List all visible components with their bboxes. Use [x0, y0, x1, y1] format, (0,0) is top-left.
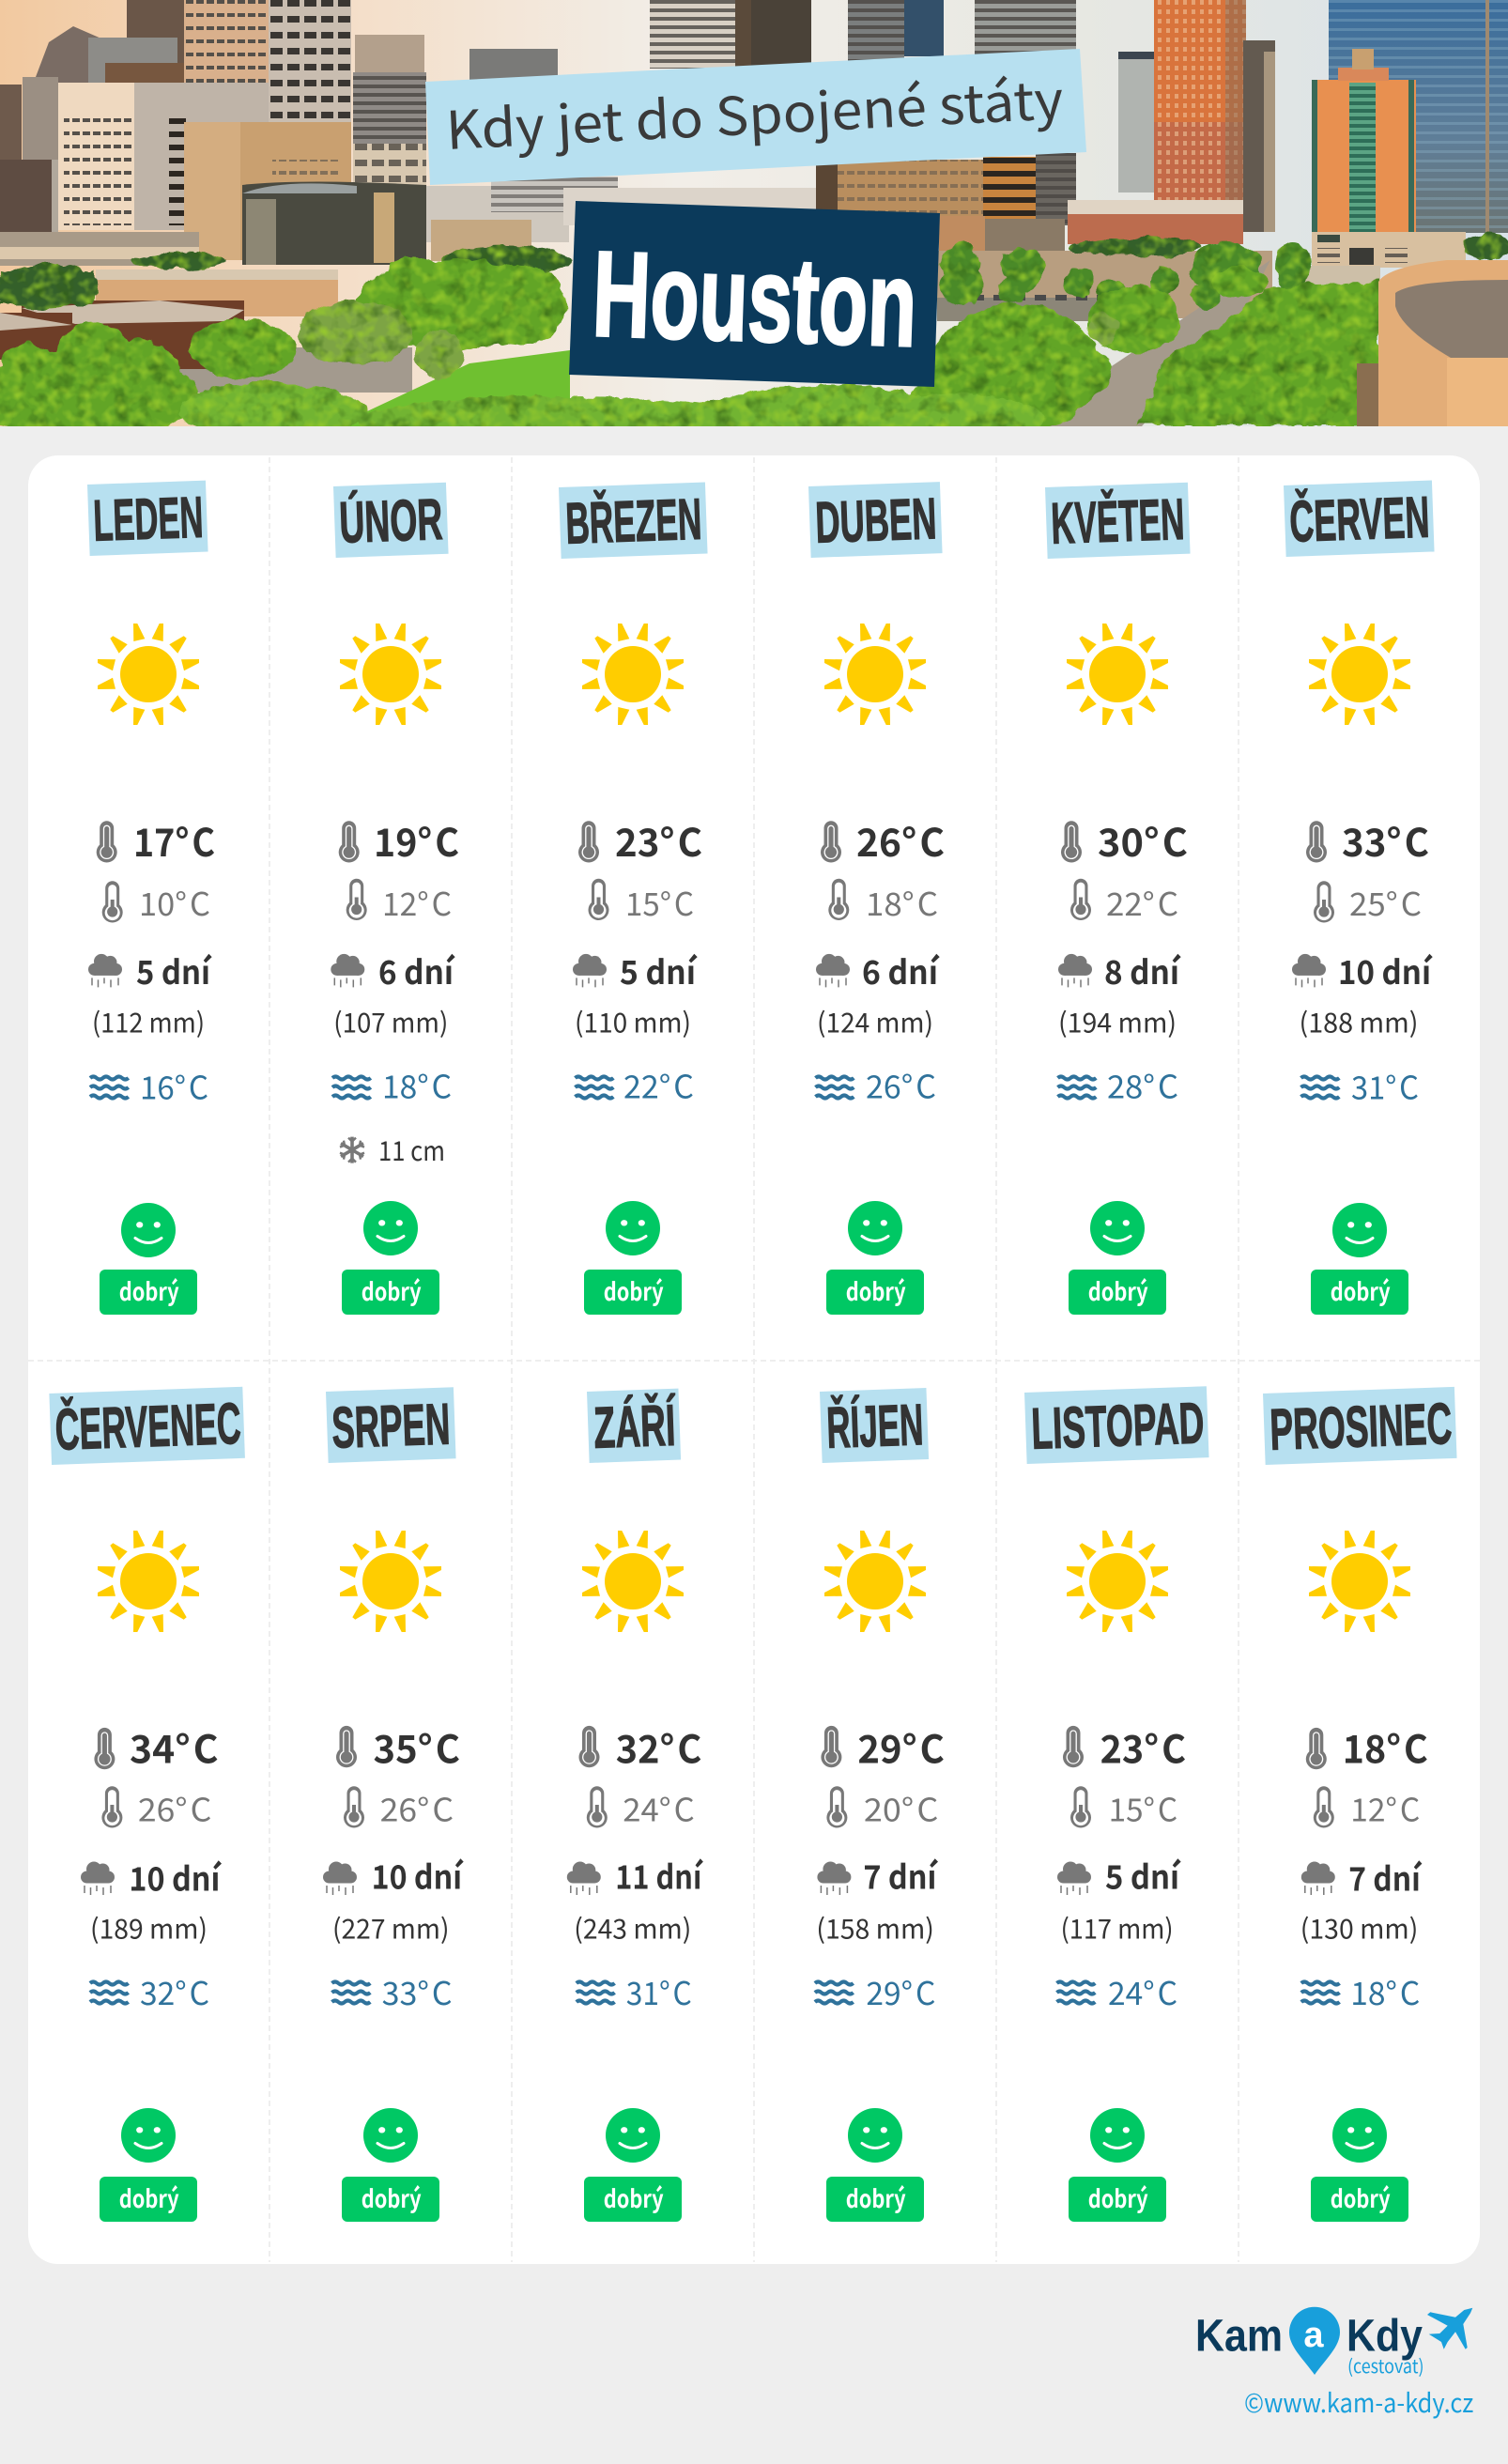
rating badge: [100, 2177, 197, 2222]
min temperature: 10°C: [139, 879, 210, 925]
min temperature: [102, 879, 210, 925]
title text: Houston: [591, 226, 919, 372]
min temperature: [828, 879, 938, 925]
month: listopad: [1024, 1386, 1209, 2222]
sea temperature: 18°C: [382, 1061, 452, 1108]
icon: sun: [1067, 624, 1168, 725]
rating badge: dobrý: [119, 1273, 179, 1308]
sea temperature: 22°C: [623, 1061, 694, 1108]
max temperature: 35°C: [374, 1718, 460, 1775]
precipitation: (188 mm): [1300, 1001, 1418, 1040]
photo: Houston skyline: [0, 0, 1508, 445]
month: září: [567, 1389, 703, 2222]
min temperature: [1314, 1784, 1420, 1830]
panel: climate table: [28, 455, 1480, 2264]
rating badge: [1069, 1270, 1166, 1315]
sea temperature: [1301, 1063, 1419, 1109]
min temperature: 12°C: [382, 879, 452, 925]
min temperature: 18°C: [866, 879, 938, 925]
max temperature: 34°C: [130, 1718, 218, 1775]
icon: sun: [1309, 1531, 1410, 1632]
month: květen: [1045, 483, 1191, 1315]
rain days: 5 dní: [136, 947, 212, 994]
month label: [87, 481, 208, 556]
max temperature: [821, 1718, 945, 1775]
precipitation: (110 mm): [575, 1001, 691, 1040]
sea temperature: [575, 1061, 694, 1108]
month label: KVĚTEN: [1050, 487, 1185, 557]
icon: sun: [1309, 624, 1410, 725]
sea temperature: 16°C: [140, 1063, 208, 1109]
rain days: [88, 947, 212, 994]
month: leden: [87, 481, 215, 1315]
min temperature: [101, 1784, 211, 1830]
precipitation: (130 mm): [1300, 1907, 1418, 1947]
rain days: 10 dní: [372, 1852, 464, 1900]
min temperature: 20°C: [864, 1784, 938, 1830]
min temperature: [588, 879, 694, 925]
sea temperature: 28°C: [1107, 1061, 1178, 1108]
rain days: 10 dní: [129, 1853, 223, 1901]
precipitation: (194 mm): [1058, 1001, 1177, 1040]
max temperature: 30°C: [1098, 811, 1188, 868]
rating badge: [826, 1270, 924, 1315]
precipitation: (243 mm): [574, 1907, 691, 1947]
sea temperature: [332, 1968, 453, 2014]
rain days: 6 dní: [862, 947, 940, 994]
month label: [49, 1387, 245, 1465]
title box: [569, 201, 940, 387]
sea temperature: 24°C: [1108, 1968, 1177, 2014]
rain days: [1058, 947, 1181, 994]
rating badge: dobrý: [604, 2180, 664, 2215]
rating badge: dobrý: [1331, 2180, 1391, 2215]
icon: sun: [98, 624, 199, 725]
sea temperature: 31°C: [626, 1968, 692, 2014]
month: červenec: [49, 1387, 245, 2222]
month label: [326, 1387, 456, 1463]
max temperature: 23°C: [1100, 1718, 1186, 1775]
precipitation: (124 mm): [817, 1001, 933, 1040]
min temperature: [346, 879, 452, 925]
rating badge: dobrý: [362, 2180, 422, 2215]
min temperature: [1314, 879, 1422, 925]
sea temperature: 18°C: [1350, 1968, 1420, 2014]
max temperature: 17°C: [133, 811, 215, 868]
month: prosinec: [1263, 1387, 1457, 2222]
snowfall: [340, 1130, 445, 1169]
rain days: [331, 947, 455, 994]
min temperature: 25°C: [1349, 879, 1422, 925]
icon: smiley: [848, 2108, 902, 2163]
icon: sun: [1067, 1531, 1168, 1632]
icon: sun: [98, 1531, 199, 1632]
month: říjen: [815, 1388, 945, 2222]
rain days: 6 dní: [378, 947, 455, 994]
icon: smiley: [606, 2108, 660, 2163]
icon: airplane: [1427, 2308, 1472, 2349]
min temperature: 24°C: [623, 1784, 695, 1830]
rain days: 5 dní: [620, 947, 698, 994]
logo: Kam a Kdy: a: [1303, 2316, 1324, 2355]
icon: smiley: [606, 1201, 660, 1255]
website credit: ©www.kam-a-kdy.cz: [1244, 2383, 1473, 2421]
month label: ŘÍJEN: [825, 1393, 925, 1461]
min temperature: 15°C: [1109, 1784, 1177, 1830]
max temperature: 26°C: [856, 811, 945, 868]
rain days: [1292, 947, 1433, 994]
month label: ČERVENEC: [54, 1392, 242, 1463]
min temperature: [1070, 1784, 1177, 1830]
month label: [559, 483, 708, 559]
rating badge: [342, 1270, 439, 1315]
snowfall: 11 cm: [378, 1130, 445, 1169]
max temperature: 23°C: [615, 811, 702, 868]
rain days: [816, 947, 940, 994]
icon: smiley: [121, 2108, 176, 2163]
icon: smiley: [1090, 1201, 1145, 1255]
logo: Kam a Kdy: Kdy: [1346, 2311, 1423, 2361]
icon: sun: [582, 624, 684, 725]
min temperature: 26°C: [138, 1784, 211, 1830]
rating badge: [826, 2177, 924, 2222]
month label: BŘEZEN: [564, 487, 702, 557]
month: duben: [808, 482, 945, 1315]
rating badge: dobrý: [846, 2180, 906, 2215]
rain days: 5 dní: [1105, 1852, 1181, 1900]
max temperature: [97, 811, 215, 868]
logo: Kam a Kdy: Kam: [1195, 2311, 1283, 2361]
max temperature: [1306, 1718, 1428, 1775]
rating badge: dobrý: [1088, 1273, 1148, 1308]
min temperature: [1070, 879, 1178, 925]
icon: smiley: [1090, 2108, 1145, 2163]
sea temperature: [815, 1968, 935, 2014]
precipitation: (107 mm): [333, 1001, 448, 1040]
min temperature: [826, 1784, 938, 1830]
min temperature: [344, 1784, 454, 1830]
max temperature: [336, 1718, 460, 1775]
rain days: 10 dní: [1338, 947, 1433, 994]
rating badge: [584, 2177, 682, 2222]
logo: Kam a Kdy: [1195, 2307, 1472, 2379]
sea temperature: [577, 1968, 692, 2014]
month label: [1024, 1386, 1209, 1464]
precipitation: (227 mm): [332, 1907, 449, 1947]
month label: [587, 1389, 681, 1463]
precipitation: (117 mm): [1061, 1907, 1174, 1947]
sea temperature: [1057, 1968, 1177, 2014]
icon: sun: [340, 1531, 441, 1632]
icon: map pin: [1289, 2307, 1340, 2375]
month label: LEDEN: [92, 485, 205, 554]
month: srpen: [323, 1387, 464, 2222]
sea temperature: 26°C: [866, 1061, 936, 1108]
rain days: [573, 947, 698, 994]
icon: sun: [582, 1531, 684, 1632]
max temperature: 18°C: [1343, 1718, 1428, 1775]
month label: LISTOPAD: [1030, 1391, 1205, 1462]
sea temperature: 32°C: [140, 1968, 209, 2014]
sea temperature: [90, 1063, 208, 1109]
month label: SRPEN: [331, 1392, 452, 1461]
rating badge: [1311, 1270, 1408, 1315]
sea temperature: [1057, 1061, 1178, 1108]
icon: smiley: [363, 1201, 418, 1255]
subtitle ribbon: [425, 49, 1086, 185]
rain days: 8 dní: [1104, 947, 1181, 994]
max temperature: 29°C: [857, 1718, 945, 1775]
rain days: [323, 1852, 464, 1900]
sea temperature: 31°C: [1351, 1063, 1419, 1109]
month label: ZÁŘÍ: [592, 1394, 678, 1461]
month: únor: [331, 483, 459, 1315]
rating badge: dobrý: [362, 1273, 422, 1308]
sea temperature: [815, 1061, 936, 1108]
rain days: [81, 1853, 223, 1901]
sea temperature: [332, 1061, 452, 1108]
max temperature: 33°C: [1342, 811, 1429, 868]
month label: ÚNOR: [338, 487, 444, 556]
sea temperature: 29°C: [866, 1968, 935, 2014]
rating badge: dobrý: [1331, 1273, 1391, 1308]
sea temperature: [1301, 1968, 1420, 2014]
icon: smiley: [363, 2108, 418, 2163]
min temperature: 15°C: [625, 879, 694, 925]
sea temperature: 33°C: [382, 1968, 453, 2014]
icon: sun: [824, 624, 926, 725]
rain days: 11 dní: [615, 1852, 703, 1900]
month label: [1284, 480, 1435, 557]
min temperature: 22°C: [1106, 879, 1178, 925]
max temperature: [1063, 1718, 1186, 1775]
month: březen: [559, 483, 708, 1315]
rating badge: dobrý: [119, 2180, 179, 2215]
rain days: [567, 1852, 703, 1900]
max temperature: 19°C: [374, 811, 459, 868]
rating badge: dobrý: [604, 1273, 664, 1308]
logo: Kam a Kdy: (cestovat): [1347, 2351, 1423, 2379]
rating badge: [100, 1270, 197, 1315]
rain days: [1301, 1853, 1423, 1901]
precipitation: (112 mm): [92, 1001, 205, 1040]
month label: [333, 483, 449, 558]
rain days: [817, 1852, 939, 1900]
rating badge: [1311, 2177, 1408, 2222]
month: červen: [1284, 480, 1435, 1315]
min temperature: 12°C: [1350, 1784, 1420, 1830]
icon: smiley: [1332, 2108, 1387, 2163]
min temperature: 26°C: [380, 1784, 454, 1830]
icon: smiley: [1332, 1203, 1387, 1257]
rating badge: [342, 2177, 439, 2222]
month label: [1045, 483, 1191, 559]
precipitation: (158 mm): [816, 1907, 934, 1947]
rain days: 7 dní: [1348, 1853, 1423, 1901]
max temperature: [578, 1718, 701, 1775]
icon: sun: [340, 624, 441, 725]
month label: DUBEN: [814, 486, 938, 556]
rating badge: [1069, 2177, 1166, 2222]
min temperature: [587, 1784, 695, 1830]
icon: smiley: [121, 1203, 176, 1257]
rating badge: dobrý: [846, 1273, 906, 1308]
icon: sun: [824, 1531, 926, 1632]
month label: [808, 482, 943, 558]
precipitation: (189 mm): [90, 1907, 208, 1947]
max temperature: 32°C: [616, 1718, 701, 1775]
rain days: 7 dní: [863, 1852, 939, 1900]
month label: [820, 1388, 929, 1463]
rating badge: dobrý: [1088, 2180, 1148, 2215]
icon: smiley: [848, 1201, 902, 1255]
rain days: [1057, 1852, 1181, 1900]
sea temperature: [90, 1968, 209, 2014]
rating badge: [584, 1270, 682, 1315]
subtitle text: Kdy jet do Spojené státy: [444, 58, 1065, 165]
